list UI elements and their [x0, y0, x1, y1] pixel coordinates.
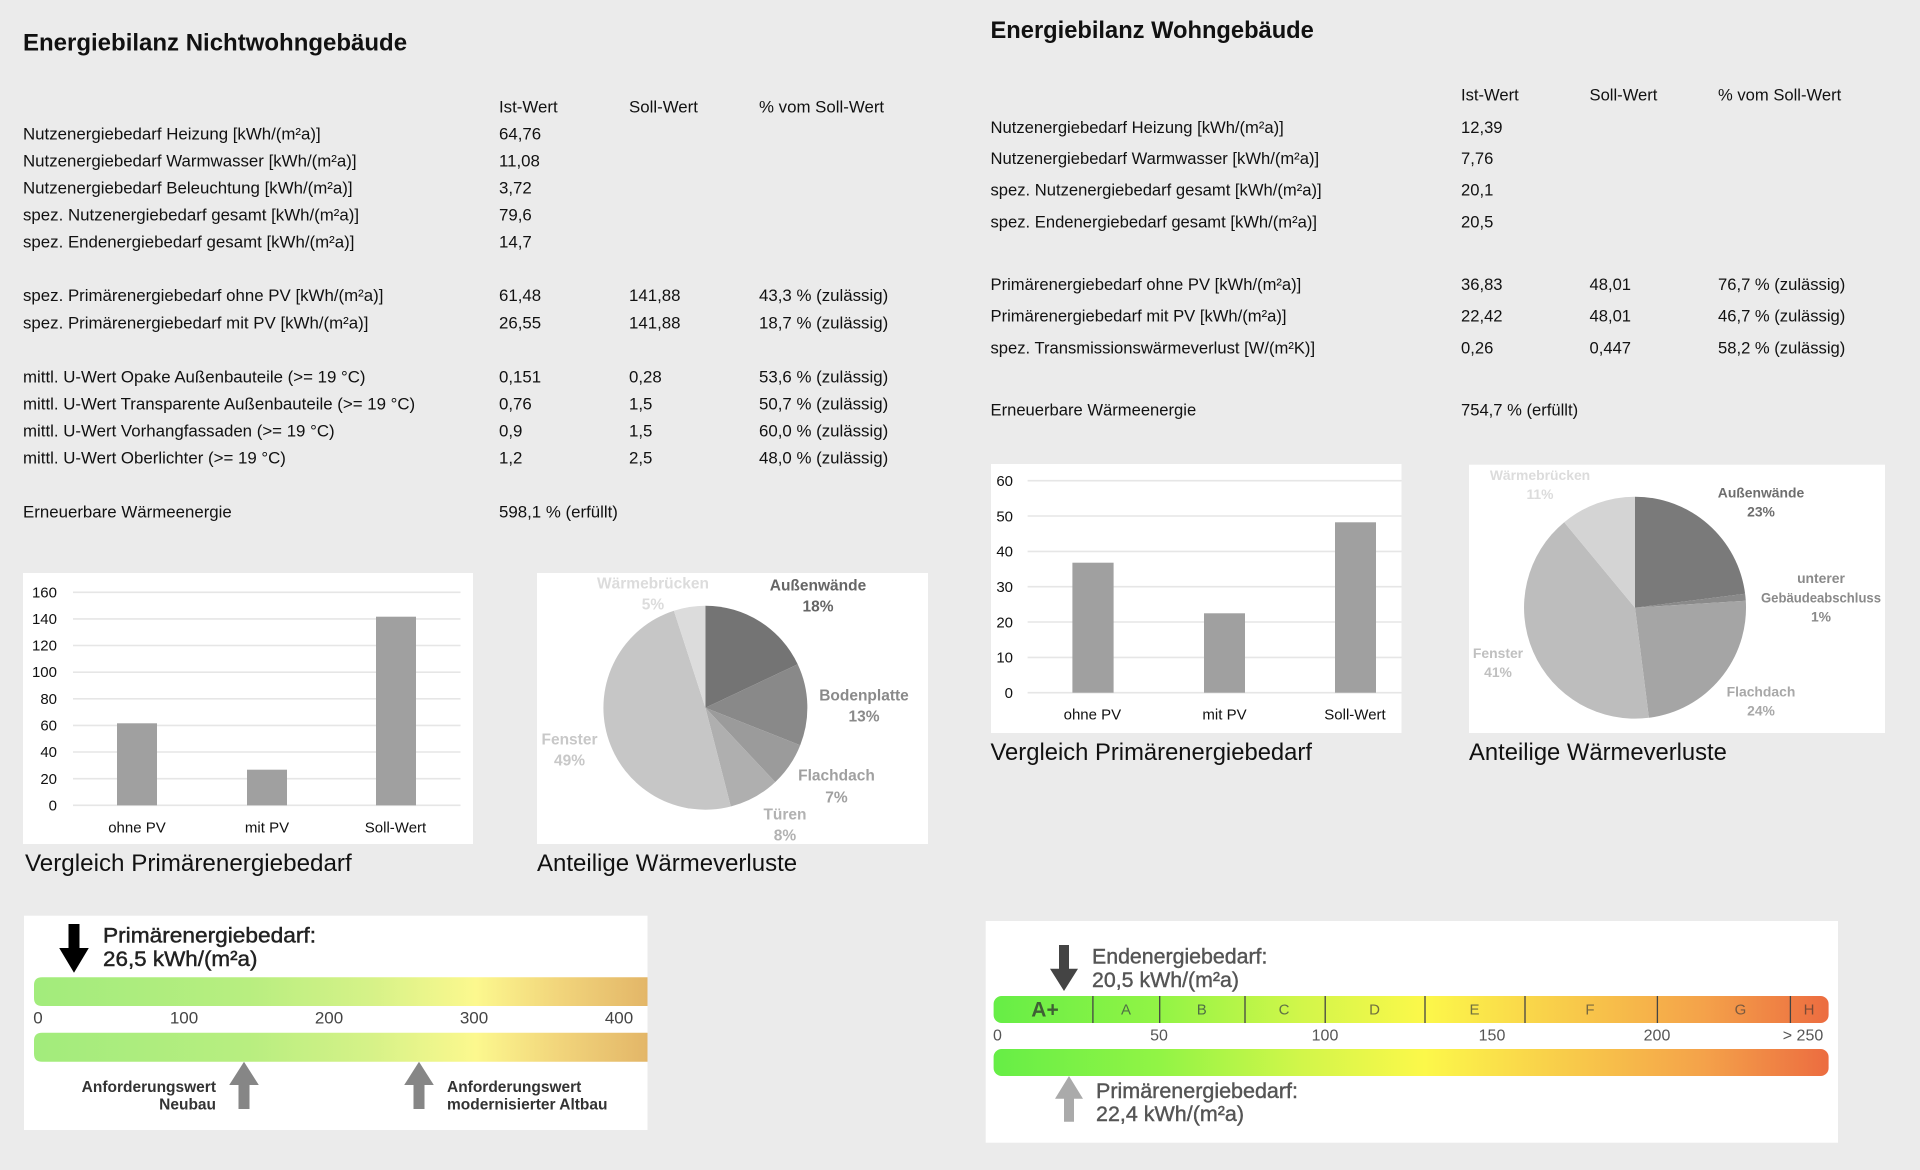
panel: Energiebilanz Nichtwohngebäude table	[23, 30, 888, 522]
table rows: Primärenergie: 48,01	[1590, 307, 1631, 326]
y axis labels: 0	[1005, 685, 1013, 702]
panel: Energiebilanz Wohngebäude table	[990, 18, 1845, 420]
table rows: Primärenergie: spez. Transmissionswärmeverlust [W/(m²K)]	[990, 338, 1315, 358]
table rows: U-Werte: 60,0 % (zulässig)	[759, 422, 888, 440]
table rows: Primärenergie: 0,26	[1461, 338, 1493, 358]
table rows: U-Werte	[23, 368, 888, 468]
panel: Energieskala Nichtwohngebäude	[24, 916, 648, 1130]
table rows: Primärenergie: 43,3 % (zulässig)	[759, 286, 888, 305]
label: Anforderungswert Neubau	[82, 1079, 216, 1114]
table header: Soll-Wert	[629, 98, 698, 116]
class letters: E	[1469, 1002, 1480, 1018]
class letters	[1031, 998, 1814, 1022]
y axis labels: 120	[32, 638, 57, 654]
table rows: U-Werte: 2,5	[629, 448, 652, 468]
bars	[1072, 522, 1376, 693]
table row: Erneuerbare Wärmeenergie: 598,1 % (erfüllt)	[499, 502, 618, 522]
pie labels: 5%	[642, 596, 664, 614]
scale numbers: 150	[1479, 1028, 1505, 1044]
table rows: Primärenergie: 18,7 % (zulässig)	[759, 314, 888, 332]
label: Anforderungswert Neubau: Neubau	[159, 1096, 216, 1114]
scale numbers: 100	[1312, 1028, 1338, 1044]
scale numbers: 100	[170, 1009, 198, 1028]
class dividers	[1093, 996, 1790, 1023]
value: Primärenergiebedarf	[1096, 1080, 1298, 1126]
scale numbers: 50	[1150, 1028, 1168, 1044]
scale numbers	[33, 1009, 633, 1028]
table rows: U-Werte: 0,28	[629, 368, 662, 387]
y axis labels: 50	[996, 508, 1013, 526]
scale numbers: 200	[1644, 1028, 1670, 1044]
table rows: Primärenergie	[990, 275, 1845, 358]
y axis labels: 40	[996, 544, 1013, 560]
y axis labels: 20	[40, 771, 57, 788]
category labels	[1064, 706, 1387, 724]
y axis labels: 100	[32, 664, 57, 681]
table row: Erneuerbare Wärmeenergie: 754,7 % (erfüllt)	[1461, 401, 1578, 420]
label: Anforderungswert modernisierter Altbau: modernisierter Altbau	[447, 1096, 608, 1114]
caption: Vergleich Primärenergiebedarf: Vergleich Primärenergiebedarf	[25, 850, 352, 877]
pie labels: Bodenplatte	[819, 688, 909, 704]
bar chart: Vergleich Primärenergiebedarf Nichtwohngebäude	[23, 573, 473, 844]
table rows: Primärenergie: 76,7 % (zulässig)	[1718, 275, 1845, 294]
table rows: Primärenergie: 46,7 % (zulässig)	[1718, 307, 1845, 326]
table rows: Primärenergie: 22,42	[1461, 307, 1503, 326]
table rows: Primärenergie: 141,88	[629, 286, 681, 305]
table row: Erneuerbare Wärmeenergie	[990, 401, 1578, 420]
table rows: U-Werte: 0,151	[499, 368, 541, 387]
heading: Wohngebäude: Energiebilanz Wohngebäude	[990, 18, 1314, 44]
bar chart: Vergleich Primärenergiebedarf Wohngebäude	[991, 464, 1402, 733]
pie labels: 23%	[1747, 504, 1775, 520]
pie labels: 1%	[1811, 608, 1831, 624]
pie labels: Außenwände	[1718, 484, 1804, 500]
pie labels: 7%	[825, 790, 848, 806]
pie labels: 49%	[554, 752, 585, 770]
y axis labels: 30	[996, 579, 1013, 596]
icon: dark arrow down	[1050, 945, 1078, 991]
table rows: Nutzenergie	[23, 124, 541, 251]
category labels: Soll-Wert	[1324, 706, 1387, 724]
category labels: ohne PV	[1064, 706, 1121, 724]
table rows: Nutzenergie	[990, 118, 1503, 231]
pie labels	[542, 576, 909, 844]
scale bar upper	[34, 977, 648, 1006]
table rows: Primärenergie: 58,2 % (zulässig)	[1718, 338, 1845, 358]
scale numbers: 200	[315, 1009, 343, 1028]
table rows: U-Werte: 1,5	[629, 395, 652, 414]
value: Primärenergiebedarf: 26,5 kWh/(m²a)	[103, 947, 258, 971]
table rows: Primärenergie: Primärenergiebedarf ohne PV [kWh/(m²a)]	[990, 275, 1301, 294]
pie labels: 13%	[848, 708, 880, 726]
class letters: G	[1735, 1002, 1746, 1018]
table header: % vom Soll-Wert	[1718, 86, 1842, 104]
pie slices	[1524, 497, 1746, 719]
scale numbers: 0	[993, 1028, 1002, 1044]
table rows: U-Werte: 0,9	[499, 422, 522, 440]
table rows: Nutzenergie: 12,39	[1461, 118, 1503, 137]
class letters: A+	[1031, 998, 1059, 1022]
label: Anforderungswert Neubau: Anforderungswert	[82, 1079, 216, 1096]
pie labels: 24%	[1747, 702, 1775, 718]
scale numbers: 300	[460, 1009, 488, 1028]
pie labels: Wärmebrücken	[1490, 467, 1590, 483]
table rows: Primärenergie: 0,447	[1590, 338, 1631, 358]
label: Anforderungswert modernisierter Altbau: Anforderungswert	[447, 1079, 581, 1096]
table rows: Primärenergie: Primärenergiebedarf mit PV [kWh/(m²a)]	[990, 307, 1286, 326]
value: Primärenergiebedarf: Primärenergiebedarf:	[1096, 1080, 1298, 1103]
table rows: U-Werte: mittl. U-Wert Vorhangfassaden (>= 19 °C)	[23, 422, 335, 440]
table rows: Primärenergie: 26,55	[499, 314, 541, 332]
pie labels: Fenster	[542, 732, 598, 748]
y axis labels	[32, 584, 57, 814]
pie labels	[1473, 467, 1881, 718]
icon: grey arrow Altbau	[404, 1062, 434, 1109]
table rows: Nutzenergie: Nutzenergiebedarf Warmwasser [kWh/(m²a)]	[990, 149, 1319, 168]
table rows: Nutzenergie: 20,5	[1461, 212, 1493, 231]
table header: Soll-Wert	[1590, 86, 1658, 104]
table rows: U-Werte: mittl. U-Wert Oberlichter (>= 19 °C)	[23, 448, 286, 468]
table rows: Primärenergie: 48,01	[1590, 275, 1631, 294]
table header	[499, 98, 884, 116]
table rows: U-Werte: 53,6 % (zulässig)	[759, 368, 888, 387]
scale bar with classes	[994, 996, 1829, 1023]
table rows: Nutzenergie: 3,72	[499, 178, 532, 197]
y axis labels: 0	[49, 798, 57, 814]
scale numbers	[993, 1028, 1823, 1044]
pie labels: Flachdach	[798, 768, 875, 784]
class letters: B	[1197, 1002, 1207, 1018]
table rows: U-Werte: mittl. U-Wert Opake Außenbauteile (>= 19 °C)	[23, 368, 366, 387]
pie labels: unterer	[1797, 570, 1846, 586]
table rows: Nutzenergie: 20,1	[1461, 181, 1493, 200]
heading: Nichtwohngebäude: Energiebilanz Nichtwohngebäude	[23, 30, 407, 56]
table rows: Nutzenergie: Nutzenergiebedarf Heizung [kWh/(m²a)]	[23, 124, 321, 144]
pie labels: Fenster	[1473, 645, 1524, 661]
y axis labels: 20	[996, 614, 1013, 632]
pie labels: Gebäudeabschluss	[1761, 590, 1881, 606]
y axis labels: 10	[996, 650, 1013, 666]
table row: Erneuerbare Wärmeenergie	[23, 502, 618, 522]
category labels: mit PV	[1202, 706, 1247, 724]
category labels	[108, 820, 427, 836]
y axis labels	[996, 473, 1013, 702]
table header: Ist-Wert	[1461, 86, 1519, 104]
table rows: U-Werte: 48,0 % (zulässig)	[759, 448, 888, 468]
table header: Ist-Wert	[499, 98, 558, 116]
class letters: H	[1804, 1002, 1814, 1018]
table rows: Nutzenergie: 79,6	[499, 205, 532, 224]
category labels: mit PV	[245, 820, 289, 836]
panel: Energieskala Wohngebäude	[986, 921, 1838, 1143]
table rows: U-Werte: 50,7 % (zulässig)	[759, 395, 888, 414]
icon: grey arrow up	[1055, 1076, 1083, 1122]
pie chart: Anteilige Wärmeverluste Nichtwohngebäude	[537, 573, 928, 844]
pie labels: 11%	[1526, 486, 1554, 502]
table header	[1461, 86, 1842, 104]
pie chart: Anteilige Wärmeverluste Wohngebäude	[1469, 465, 1885, 733]
pie labels: Flachdach	[1727, 684, 1795, 700]
table rows: Nutzenergie: spez. Endenergiebedarf gesamt [kWh/(m²a)]	[23, 232, 354, 251]
icon: grey arrow Neubau	[229, 1062, 259, 1109]
y axis labels: 140	[32, 611, 57, 628]
table rows: Nutzenergie: spez. Nutzenergiebedarf gesamt [kWh/(m²a)]	[990, 181, 1322, 200]
table rows: Nutzenergie: spez. Endenergiebedarf gesamt [kWh/(m²a)]	[990, 212, 1317, 231]
y axis labels: 60	[40, 718, 57, 734]
pie labels: 41%	[1484, 664, 1512, 680]
value: Endenergiebedarf: Endenergiebedarf:	[1092, 946, 1267, 968]
pie slices	[603, 606, 807, 810]
table rows: Nutzenergie: Nutzenergiebedarf Beleuchtung [kWh/(m²a)]	[23, 178, 353, 197]
scale numbers: > 250	[1783, 1028, 1823, 1044]
table rows: U-Werte: mittl. U-Wert Transparente Außenbauteile (>= 19 °C)	[23, 395, 415, 414]
icon: black arrow down	[59, 924, 89, 973]
table rows: U-Werte: 1,5	[629, 422, 652, 440]
table rows: Nutzenergie: 7,76	[1461, 149, 1493, 168]
caption: Vergleich Primärenergiebedarf: Vergleich Primärenergiebedarf	[990, 739, 1312, 766]
caption: Anteilige Wärmeverluste: Anteilige Wärmeverluste	[537, 850, 797, 877]
class letters: D	[1369, 1002, 1380, 1018]
value: Primärenergiebedarf: Primärenergiebedarf:	[103, 924, 316, 948]
scale numbers: 400	[605, 1009, 633, 1028]
pie labels: 18%	[802, 598, 834, 616]
table rows: Primärenergie: spez. Primärenergiebedarf mit PV [kWh/(m²a)]	[23, 314, 368, 332]
class letters: C	[1279, 1002, 1290, 1018]
scale bar lower	[34, 1033, 648, 1062]
table rows: Primärenergie: spez. Primärenergiebedarf ohne PV [kWh/(m²a)]	[23, 286, 383, 305]
class letters: F	[1585, 1002, 1595, 1018]
table header: % vom Soll-Wert	[759, 98, 884, 116]
bars	[117, 617, 416, 805]
caption: Anteilige Wärmeverluste: Anteilige Wärmeverluste	[1469, 739, 1727, 766]
value: Primärenergiebedarf	[103, 924, 316, 971]
y axis labels: 40	[40, 744, 57, 761]
y axis labels: 160	[32, 584, 57, 602]
table rows: U-Werte: 1,2	[499, 448, 522, 468]
table rows: Nutzenergie: 11,08	[499, 152, 540, 170]
pie labels: Wärmebrücken	[597, 576, 709, 592]
pie labels: Außenwände	[770, 578, 867, 594]
table rows: Nutzenergie: Nutzenergiebedarf Warmwasser [kWh/(m²a)]	[23, 152, 357, 170]
table rows: Primärenergie: 61,48	[499, 286, 541, 305]
pie labels: Türen	[763, 806, 807, 824]
table rows: Primärenergie: 141,88	[629, 314, 681, 332]
table rows: Nutzenergie: 64,76	[499, 124, 541, 144]
value: Primärenergiebedarf: 22,4 kWh/(m²a)	[1096, 1103, 1244, 1126]
label: Anforderungswert modernisierter Altbau	[447, 1079, 608, 1114]
y axis labels: 60	[996, 473, 1013, 490]
table rows: Nutzenergie: spez. Nutzenergiebedarf gesamt [kWh/(m²a)]	[23, 205, 359, 224]
table rows: Nutzenergie: 14,7	[499, 232, 532, 251]
table rows: Primärenergie: 36,83	[1461, 275, 1503, 294]
table rows: Primärenergie	[23, 286, 888, 332]
y axis labels: 80	[40, 691, 57, 708]
table row: Erneuerbare Wärmeenergie: Erneuerbare Wärmeenergie	[23, 502, 232, 522]
scale numbers: 0	[33, 1009, 43, 1028]
category labels: Soll-Wert	[365, 820, 427, 836]
value: Endenergiebedarf: 20,5 kWh/(m²a)	[1092, 969, 1239, 992]
table rows: Nutzenergie: Nutzenergiebedarf Heizung [kWh/(m²a)]	[990, 118, 1284, 137]
class letters: A	[1121, 1002, 1131, 1018]
gradient bar	[994, 1049, 1829, 1076]
table rows: U-Werte: 0,76	[499, 395, 532, 414]
category labels: ohne PV	[108, 820, 166, 836]
pie labels: 8%	[774, 828, 796, 844]
table row: Erneuerbare Wärmeenergie: Erneuerbare Wärmeenergie	[990, 401, 1196, 420]
value: Endenergiebedarf	[1092, 946, 1267, 992]
